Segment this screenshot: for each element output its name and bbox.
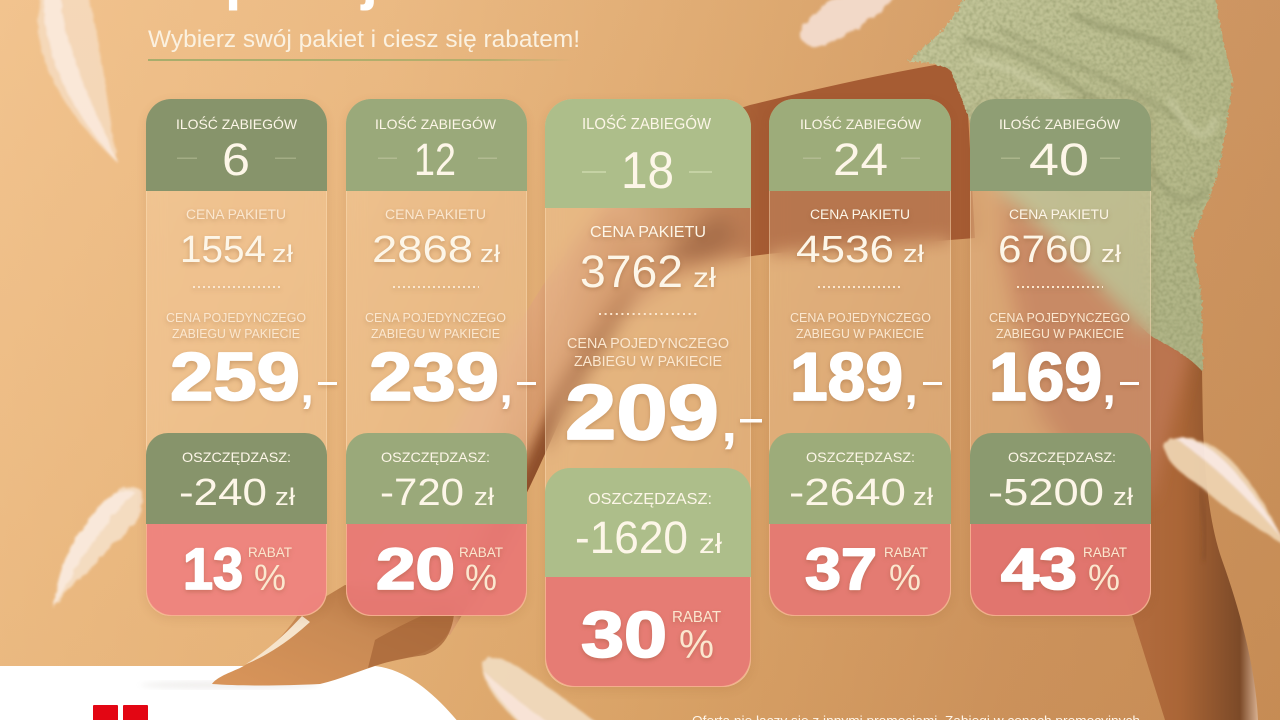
card text: CENA POJEDYNCZEGO xyxy=(365,310,506,325)
torso xyxy=(1000,220,1258,720)
pricing card: 24 treatments xyxy=(769,99,951,616)
platform shadow under foot xyxy=(140,681,320,689)
card text: ILOŚĆ ZABIEGÓW xyxy=(582,115,711,133)
header panel xyxy=(346,99,527,191)
card text: , xyxy=(500,363,512,412)
card text: 40 xyxy=(1029,134,1089,185)
card text: zł xyxy=(480,241,501,268)
card text xyxy=(988,115,1139,602)
card text: % xyxy=(889,557,921,598)
feather: top centre xyxy=(800,0,897,47)
card text: 18 xyxy=(621,142,674,200)
card text: 169 xyxy=(989,339,1102,415)
card text: zł xyxy=(474,484,495,511)
body crease xyxy=(1200,490,1206,560)
card text: OSZCZĘDZASZ: xyxy=(182,449,291,465)
card text: -5200 xyxy=(988,472,1104,514)
card text: zł xyxy=(693,262,717,293)
card text: CENA POJEDYNCZEGO xyxy=(989,310,1130,325)
card text: zł xyxy=(272,241,294,268)
card text: OSZCZĘDZASZ: xyxy=(1008,449,1116,465)
pricing card: 12 treatments xyxy=(346,99,536,617)
card text: RABAT xyxy=(1083,544,1127,560)
card text: RABAT xyxy=(248,544,292,560)
card text xyxy=(166,115,337,602)
card text: CENA PAKIETU xyxy=(186,207,286,222)
card text: OSZCZĘDZASZ: xyxy=(381,449,490,465)
card text: % xyxy=(254,557,286,598)
shin xyxy=(448,213,738,635)
feather: bottom centre xyxy=(482,658,598,720)
card text: zł xyxy=(903,241,925,268)
card text: 6760 xyxy=(998,229,1092,271)
card text: ILOŚĆ ZABIEGÓW xyxy=(375,115,497,132)
pricing card: 6 treatments xyxy=(146,99,337,620)
pricing card: 40 treatments xyxy=(970,99,1151,616)
card text: -240 xyxy=(179,472,267,514)
savings panel xyxy=(769,433,951,524)
card text: 24 xyxy=(833,134,888,185)
card text: CENA PAKIETU xyxy=(810,207,910,222)
pricing card: 18 treatments (featured) xyxy=(545,99,762,688)
card text: 259 xyxy=(170,339,300,415)
card text: , xyxy=(301,363,313,412)
card text: zł xyxy=(913,484,934,511)
card text: 2868 xyxy=(372,229,473,271)
card text: 4536 xyxy=(796,229,894,271)
card text: CENA POJEDYNCZEGO xyxy=(790,310,931,325)
discount panel xyxy=(970,524,1151,616)
card text: zł xyxy=(275,484,296,511)
card text: ILOŚĆ ZABIEGÓW xyxy=(800,115,922,132)
savings panel xyxy=(970,433,1151,524)
subtitle underline xyxy=(148,59,573,61)
card text: 37 xyxy=(805,537,877,602)
discount panel xyxy=(769,524,951,616)
card text: ZABIEGU W PAKIECIE xyxy=(574,353,722,370)
discount panel xyxy=(545,577,751,687)
card text: -720 xyxy=(380,472,464,514)
card text: CENA PAKIETU xyxy=(1009,207,1109,222)
header panel xyxy=(545,99,751,208)
card text: -2640 xyxy=(789,472,906,514)
card text xyxy=(789,115,942,602)
card text: % xyxy=(1088,557,1120,598)
card text: % xyxy=(679,623,714,667)
white platform xyxy=(0,666,460,720)
feather: lower left xyxy=(53,488,143,608)
card text: 209 xyxy=(565,368,719,456)
savings panel xyxy=(346,433,527,524)
card text: RABAT xyxy=(884,544,928,560)
card text: % xyxy=(465,557,497,598)
card text: RABAT xyxy=(459,544,503,560)
savings panel xyxy=(146,433,327,524)
card text: ILOŚĆ ZABIEGÓW xyxy=(176,115,298,132)
card text: , xyxy=(905,363,917,412)
card text: 239 xyxy=(369,339,499,415)
foot xyxy=(212,585,456,686)
feather: top left xyxy=(38,0,118,163)
card text: ZABIEGU W PAKIECIE xyxy=(172,326,300,341)
card text: CENA PAKIETU xyxy=(385,207,486,222)
card text: ZABIEGU W PAKIECIE xyxy=(371,326,500,341)
card text: OSZCZĘDZASZ: xyxy=(588,491,712,508)
thigh xyxy=(600,60,975,340)
card text xyxy=(565,114,762,671)
card text: 13 xyxy=(183,537,243,602)
subtitle: Wybierz swój pakiet i ciesz się rabatem! xyxy=(148,26,580,53)
card text xyxy=(365,115,536,602)
card text: -1620 xyxy=(575,512,688,563)
towel xyxy=(908,0,1233,372)
card text: 30 xyxy=(581,598,667,671)
card text: OSZCZĘDZASZ: xyxy=(806,449,915,465)
savings panel xyxy=(545,468,751,577)
card text: ZABIEGU W PAKIECIE xyxy=(996,326,1124,341)
discount panel xyxy=(346,524,527,616)
header panel xyxy=(970,99,1151,191)
feather: right xyxy=(1163,438,1280,545)
card text: 6 xyxy=(222,134,250,185)
header panel xyxy=(146,99,327,191)
card text: ILOŚĆ ZABIEGÓW xyxy=(999,115,1121,132)
card text: CENA PAKIETU xyxy=(590,224,706,241)
logo xyxy=(93,705,148,720)
discount panel xyxy=(146,524,327,616)
card text: zł xyxy=(1113,484,1134,511)
card text: CENA POJEDYNCZEGO xyxy=(567,335,729,352)
card text: 189 xyxy=(790,339,903,415)
card text: CENA POJEDYNCZEGO xyxy=(166,310,306,325)
card text: ZABIEGU W PAKIECIE xyxy=(796,326,924,341)
card text: , xyxy=(722,395,736,453)
card text: 1554 xyxy=(180,229,266,271)
card text: 12 xyxy=(414,134,456,185)
card text: , xyxy=(1103,363,1115,412)
card text: 20 xyxy=(376,537,455,602)
card text: zł xyxy=(699,528,723,559)
card text: 43 xyxy=(1001,537,1077,602)
card text: 3762 xyxy=(580,246,683,297)
card text: zł xyxy=(1101,241,1122,268)
card text: RABAT xyxy=(672,609,721,626)
header panel xyxy=(769,99,951,191)
